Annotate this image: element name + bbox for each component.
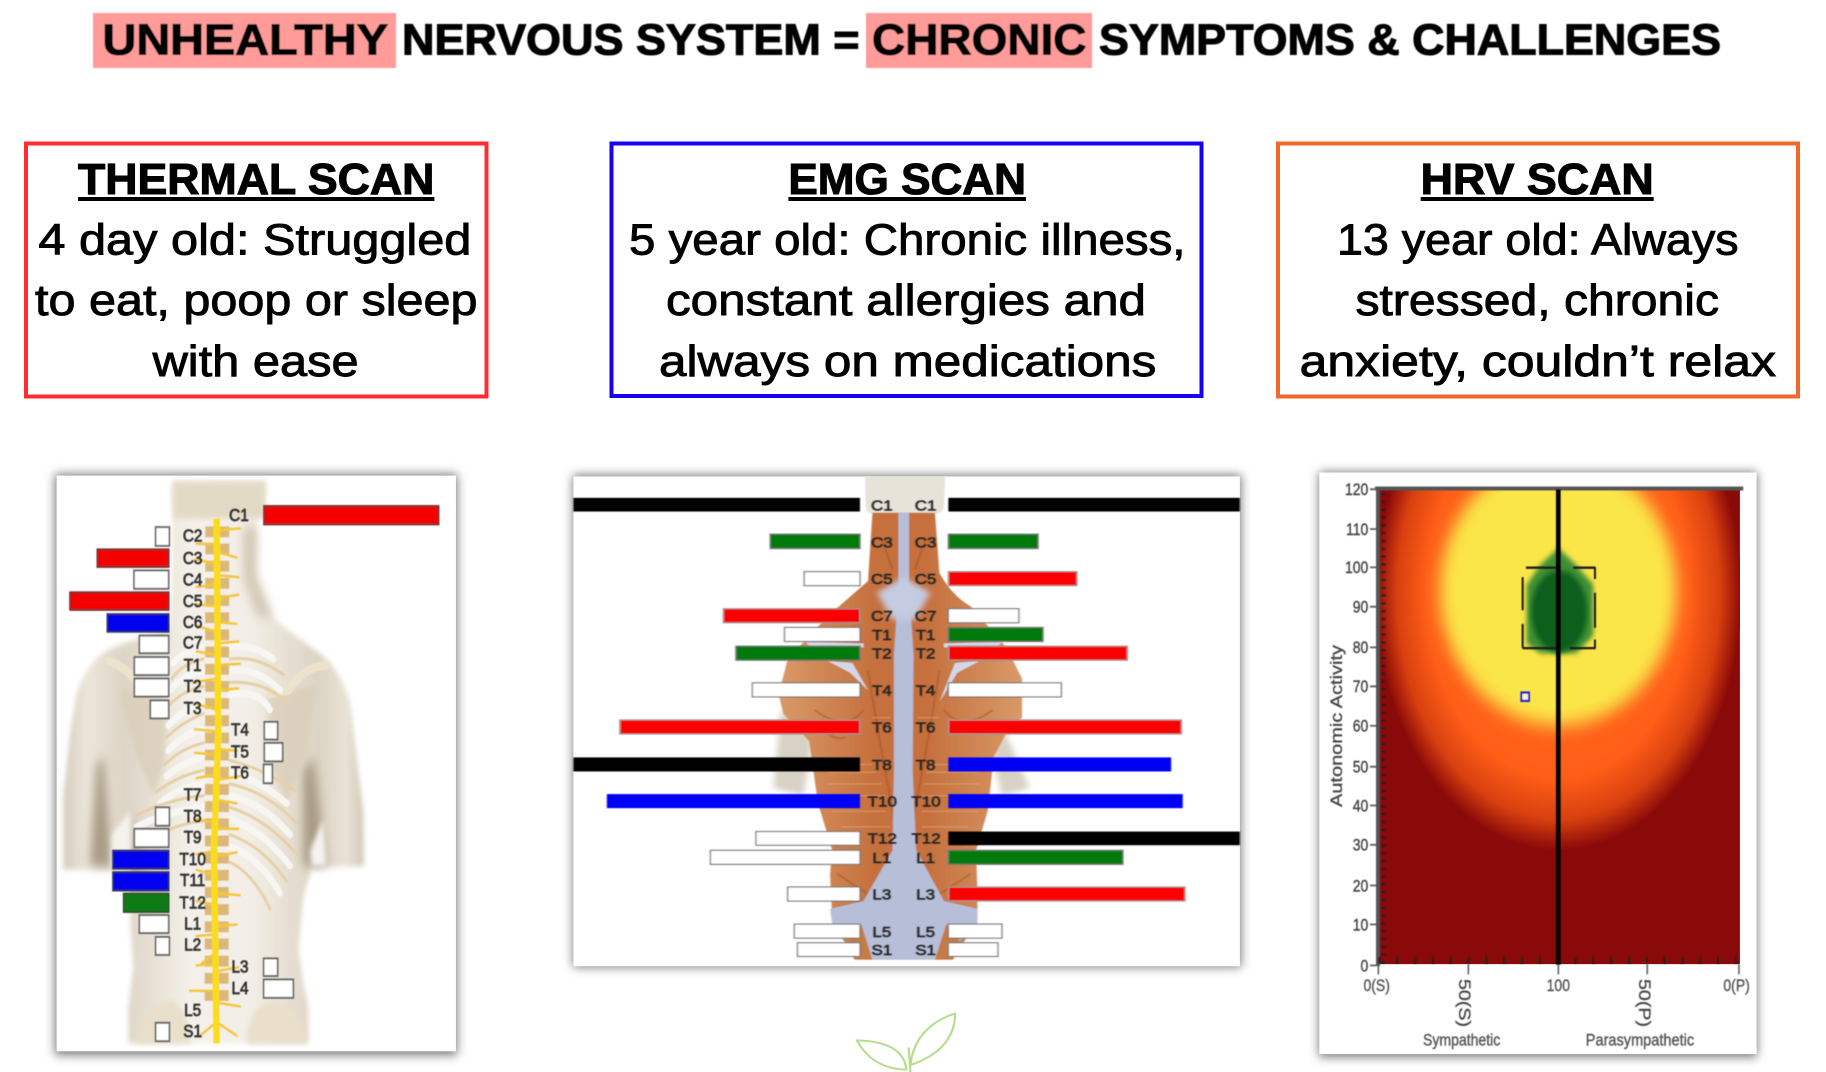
emg vertebra labels: S1 xyxy=(871,943,892,959)
title word: unhealthy: UNHEALTHY xyxy=(102,16,388,64)
heading underline xyxy=(78,197,434,201)
normal range dashed box xyxy=(1523,568,1596,648)
heading underline xyxy=(788,197,1026,201)
panel shadow: hrv xyxy=(1319,472,1757,1057)
muscle anatomy illustration xyxy=(773,476,1030,960)
green bars xyxy=(736,534,1123,864)
thermal vertebra labels: T7 xyxy=(184,785,202,805)
emg vertebra labels: T2 xyxy=(916,647,936,662)
thermal vertebra labels: C7 xyxy=(183,632,202,653)
panel shadow: emg xyxy=(573,475,1241,967)
emg box border xyxy=(612,144,1202,396)
emg vertebra labels: T6 xyxy=(916,720,936,736)
thermal vertebra labels xyxy=(179,505,249,1042)
x axis labels: 0(S) xyxy=(1363,977,1390,995)
panel: hrv scan description xyxy=(1278,144,1798,396)
thermal vertebra labels: L2 xyxy=(184,934,201,955)
emg vertebra labels: T4 xyxy=(916,683,936,699)
emg vertebra labels: L1 xyxy=(872,851,891,867)
y axis numbers: 20 xyxy=(1353,877,1368,896)
y axis numbers: 100 xyxy=(1345,559,1368,577)
thermal vertebra labels: C3 xyxy=(183,548,202,568)
y axis numbers xyxy=(1345,481,1368,976)
y axis numbers: 60 xyxy=(1353,718,1368,736)
spinal tendon xyxy=(830,513,977,960)
panel: emg muscle scan xyxy=(573,476,1240,1072)
x axis rotated label: 50(P): 50(P) xyxy=(1635,979,1654,1027)
emg vertebra labels: T1 xyxy=(916,628,936,644)
emg vertebra labels: L5 xyxy=(916,925,935,941)
x axis labels: Parasympathetic xyxy=(1586,1031,1694,1050)
emg vertebra labels: C5 xyxy=(915,572,937,588)
pale arms xyxy=(773,710,1030,796)
title word: chronic: CHRONIC xyxy=(872,16,1086,64)
y axis numbers: 110 xyxy=(1346,521,1368,539)
black bars xyxy=(573,498,1240,845)
collar bones xyxy=(108,661,327,694)
thermal vertebra labels: L1 xyxy=(184,913,201,934)
thermal vertebra labels: T12 xyxy=(179,892,206,913)
emg vertebra labels: L5 xyxy=(872,925,891,941)
shoulder blade tendons xyxy=(806,641,1002,702)
emg vertebra labels: T8 xyxy=(872,758,892,774)
thermal vertebra labels: C4 xyxy=(183,569,202,590)
hrv scan background xyxy=(1319,472,1757,1054)
emg vertebra labels: C1 xyxy=(871,498,893,514)
pelvis xyxy=(137,1001,305,1043)
thermal vertebra labels: T4 xyxy=(231,719,249,740)
blue bars xyxy=(607,757,1183,808)
emg vertebra labels: T12 xyxy=(911,832,941,847)
green zone outer xyxy=(1527,548,1593,653)
y axis numbers: 120 xyxy=(1345,481,1368,499)
red bars xyxy=(620,572,1185,901)
dark red base xyxy=(1378,488,1740,964)
thermal vertebra labels: T6 xyxy=(231,762,249,783)
x axis labels xyxy=(1363,977,1750,1050)
muscle fibre texture xyxy=(828,718,980,827)
emg vertebra labels: C1 xyxy=(915,498,937,514)
thermal case text xyxy=(35,216,477,386)
thermal case text: with ease xyxy=(151,337,359,386)
emg vertebra labels: T12 xyxy=(868,832,897,847)
thermal vertebra labels: T8 xyxy=(184,806,202,826)
x axis labels: 100 xyxy=(1547,977,1570,995)
neck xyxy=(865,476,945,515)
ribs xyxy=(137,647,297,909)
x axis rotated label: 50(S): 50(S) xyxy=(1455,979,1474,1027)
thermal vertebra labels: C6 xyxy=(183,612,202,632)
emg vertebra labels: T10 xyxy=(911,794,941,810)
emg bars xyxy=(573,498,1240,956)
green zone core xyxy=(1531,570,1587,652)
hrv box border xyxy=(1278,144,1798,396)
heading: emg scan: EMG SCAN xyxy=(788,155,1026,204)
emg vertebra labels: S1 xyxy=(915,943,936,959)
thermal vertebra labels: T1 xyxy=(184,655,202,675)
thermal vertebra labels: L3 xyxy=(231,956,249,977)
thermal case text: to eat, poop or sleep xyxy=(35,276,477,325)
emg vertebra labels: T10 xyxy=(868,794,897,810)
icon: green sprout logo xyxy=(857,1013,955,1072)
blue bars xyxy=(107,614,169,891)
yellow zone core xyxy=(1460,476,1657,706)
back muscles xyxy=(779,513,1022,960)
hrv case text xyxy=(1300,216,1776,386)
heading underline xyxy=(1421,197,1654,201)
y axis numbers: 40 xyxy=(1353,797,1368,816)
patient marker xyxy=(1521,693,1529,701)
thermal vertebra labels: T9 xyxy=(184,827,202,847)
thermal vertebra labels: C5 xyxy=(183,591,202,611)
body silhouette xyxy=(63,481,364,1043)
highlight: chronic xyxy=(866,13,1092,68)
vertebrae xyxy=(181,526,253,1006)
emg vertebra labels: T4 xyxy=(872,683,892,699)
thermal vertebra labels: T5 xyxy=(231,741,249,762)
neck tendon xyxy=(877,577,931,620)
yellow zone glow xyxy=(1440,456,1677,725)
emg vertebra labels: L3 xyxy=(916,887,935,903)
heat map plot xyxy=(1379,490,1740,964)
shoulder blades xyxy=(120,686,315,803)
emg vertebra labels: T2 xyxy=(872,647,892,662)
panel: emg scan description xyxy=(612,144,1202,396)
heading: hrv scan: HRV SCAN xyxy=(1421,155,1654,204)
title words: nervous system equals: NERVOUS SYSTEM = xyxy=(402,16,860,64)
arm shadows xyxy=(90,757,327,870)
emg vertebra labels: L1 xyxy=(916,851,935,867)
lower muscle wedges xyxy=(846,924,962,960)
emg case text: 5 year old: Chronic illness, xyxy=(629,216,1186,264)
panel: thermal scan description xyxy=(26,144,486,396)
y axis numbers: 30 xyxy=(1353,837,1368,855)
white bars xyxy=(710,572,1061,956)
sprout right leaf xyxy=(911,1013,955,1065)
plot frame and ticks xyxy=(1370,487,1743,974)
emg vertebra labels xyxy=(868,498,941,959)
x axis labels: 0(P) xyxy=(1723,977,1750,995)
y axis numbers: 50 xyxy=(1353,759,1368,777)
thermal box border xyxy=(26,144,486,396)
emg vertebra labels: C3 xyxy=(915,535,937,551)
y axis numbers: 10 xyxy=(1353,916,1368,935)
emg vertebra labels: C5 xyxy=(871,572,893,588)
emg vertebra labels: C3 xyxy=(871,535,893,551)
emg vertebra labels: L3 xyxy=(872,887,891,903)
neck shading xyxy=(173,481,265,519)
hrv case text: 13 year old: Always xyxy=(1337,216,1739,264)
thermal vertebra labels: C1 xyxy=(229,505,249,525)
title words: symptoms and challenges: SYMPTOMS & CHALLENGES xyxy=(1099,16,1721,64)
emg vertebra labels: T1 xyxy=(872,628,892,644)
panel: hrv autonomic chart xyxy=(1319,472,1757,1054)
panel shadow: thermal xyxy=(55,474,457,1055)
heading: thermal scan: THERMAL SCAN xyxy=(78,155,434,204)
emg vertebra labels: C7 xyxy=(915,609,937,625)
y axis numbers: 80 xyxy=(1353,639,1368,658)
emg scan background xyxy=(573,476,1240,966)
thermal vertebra labels: L5 xyxy=(184,1000,201,1020)
thermal vertebra labels: C2 xyxy=(183,525,202,546)
back anatomy illustration xyxy=(63,481,364,1043)
green bar xyxy=(124,894,169,912)
y axis numbers: 70 xyxy=(1353,678,1368,697)
thermal case text: 4 day old: Struggled xyxy=(38,216,471,264)
emg case text: always on medications xyxy=(659,337,1156,386)
emg case text xyxy=(629,216,1186,386)
thermal vertebra labels: T3 xyxy=(184,698,202,718)
hrv case text: stressed, chronic xyxy=(1356,276,1719,325)
thermal vertebra labels: L4 xyxy=(231,978,249,998)
bottom ticks xyxy=(1378,951,1740,969)
thermal vertebra labels: T11 xyxy=(180,870,205,891)
sprout left leaf xyxy=(857,1040,906,1070)
thermal vertebra labels: S1 xyxy=(183,1021,202,1042)
red bars xyxy=(70,506,439,610)
orange zone xyxy=(1380,490,1740,847)
thermal vertebra labels: T2 xyxy=(184,676,202,696)
left axis edge xyxy=(1376,488,1380,966)
muscle shading xyxy=(814,538,993,897)
emg vertebra labels: T8 xyxy=(916,758,936,774)
hrv case text: anxiety, couldn’t relax xyxy=(1300,337,1776,386)
neck side shadow xyxy=(243,526,273,616)
emg case text: constant allergies and xyxy=(666,276,1146,325)
center divider line xyxy=(1556,489,1561,965)
thermal vertebra labels: T10 xyxy=(179,849,206,869)
thermal bars xyxy=(70,506,439,1041)
thermal scan background xyxy=(57,476,456,1051)
spinal cord xyxy=(214,519,218,1043)
sprout stem xyxy=(909,1047,910,1072)
left ticks xyxy=(1376,493,1390,964)
white gap beside torso xyxy=(112,811,327,868)
title xyxy=(93,13,1721,68)
white bars xyxy=(134,527,293,1041)
emg vertebra labels: C7 xyxy=(871,609,893,625)
emg vertebra labels: T6 xyxy=(872,720,892,736)
y axis numbers: 90 xyxy=(1353,599,1368,617)
y axis numbers: 0 xyxy=(1361,957,1368,976)
top edge xyxy=(1375,487,1743,490)
spinal nerves xyxy=(190,528,240,1036)
panel: thermal spine scan xyxy=(57,476,456,1051)
x axis labels: Sympathetic xyxy=(1423,1031,1501,1050)
major axis ticks xyxy=(1370,489,1739,974)
y axis title: Autonomic Activity xyxy=(1327,644,1346,807)
highlight: unhealthy xyxy=(93,13,396,68)
